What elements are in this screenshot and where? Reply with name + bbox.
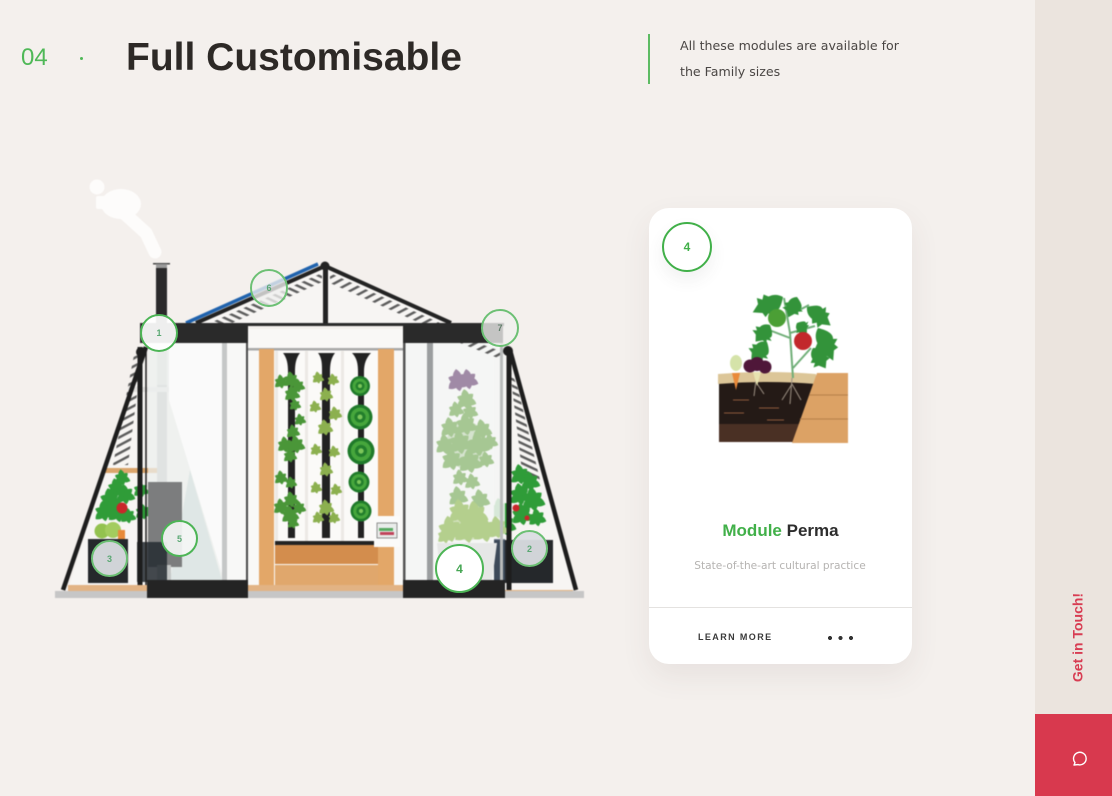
section number: 04: [21, 44, 48, 71]
green tomato: [768, 309, 786, 327]
card divider: [649, 607, 912, 608]
get in touch label: Get in Touch!: [1070, 593, 1086, 682]
panel: module card: [649, 208, 912, 664]
marker 2: [511, 530, 548, 567]
card number badge: [662, 222, 712, 272]
marker 1: 1: [156, 328, 162, 338]
intro text: All these modules are available for: [680, 38, 899, 53]
door base frames: [147, 580, 505, 598]
marker 7: 7: [497, 323, 502, 333]
top beams: [140, 323, 504, 343]
icon: chat bubble: [1072, 752, 1087, 766]
wood crate: [792, 373, 848, 443]
purple lettuce: [744, 357, 772, 374]
green dot separator: [80, 57, 83, 60]
learn more link: LEARN MORE: [698, 632, 772, 642]
chimney: [153, 263, 170, 328]
basil and climbing plant: [446, 368, 480, 392]
vertical accent line: [648, 34, 650, 84]
pale lettuce and carrot: [730, 355, 742, 371]
left glass door: [137, 343, 248, 582]
smoke: [90, 180, 155, 252]
red tomato: [794, 332, 812, 350]
marker 3: 3: [107, 554, 112, 564]
wood columns: [259, 349, 274, 585]
right tomato plant: [488, 464, 547, 536]
contact button: [1035, 714, 1112, 796]
white planter: [437, 543, 497, 581]
heater: [148, 482, 182, 567]
herbs on tower 1: [272, 371, 307, 529]
vertical tower pipes: [283, 353, 371, 538]
soil: [718, 372, 817, 442]
marker 1: [140, 314, 178, 352]
marker 5: 5: [177, 534, 182, 544]
marker 5: [161, 520, 198, 557]
illustration: perma module: [718, 294, 849, 444]
roof: [186, 262, 451, 324]
marker 4 active: [435, 544, 484, 593]
central module: [248, 329, 403, 585]
marker 7: [481, 309, 519, 347]
card title: Module Perma: [722, 521, 839, 540]
marker 2: 2: [527, 544, 532, 554]
right glass panel: [403, 343, 510, 581]
card subtitle: State-of-the-art cultural practice: [694, 560, 866, 572]
control panel: [374, 516, 400, 547]
intro text: the Family sizes: [680, 64, 780, 78]
intro text: [680, 38, 899, 78]
marker 3: [91, 540, 128, 577]
card number badge: 4: [684, 240, 690, 254]
herbs on tower 2: [308, 371, 343, 524]
more dots: [828, 636, 853, 640]
right wing: [488, 350, 576, 590]
marker 4 active: 4: [456, 562, 463, 576]
ground slab: [55, 591, 584, 598]
lettuce on tower 3: [348, 376, 374, 522]
marker 6: 6: [266, 283, 272, 293]
sidebar: [1035, 0, 1112, 796]
left wing: [68, 345, 170, 590]
marker 6: [250, 269, 288, 307]
wood floor: [68, 585, 573, 591]
roots: [754, 378, 801, 404]
tomato plant: [769, 298, 815, 378]
a-frame posts: [63, 346, 576, 590]
planter box: [275, 541, 378, 545]
left tomato plant: [93, 469, 152, 524]
title: Full Customisable: [126, 36, 462, 79]
